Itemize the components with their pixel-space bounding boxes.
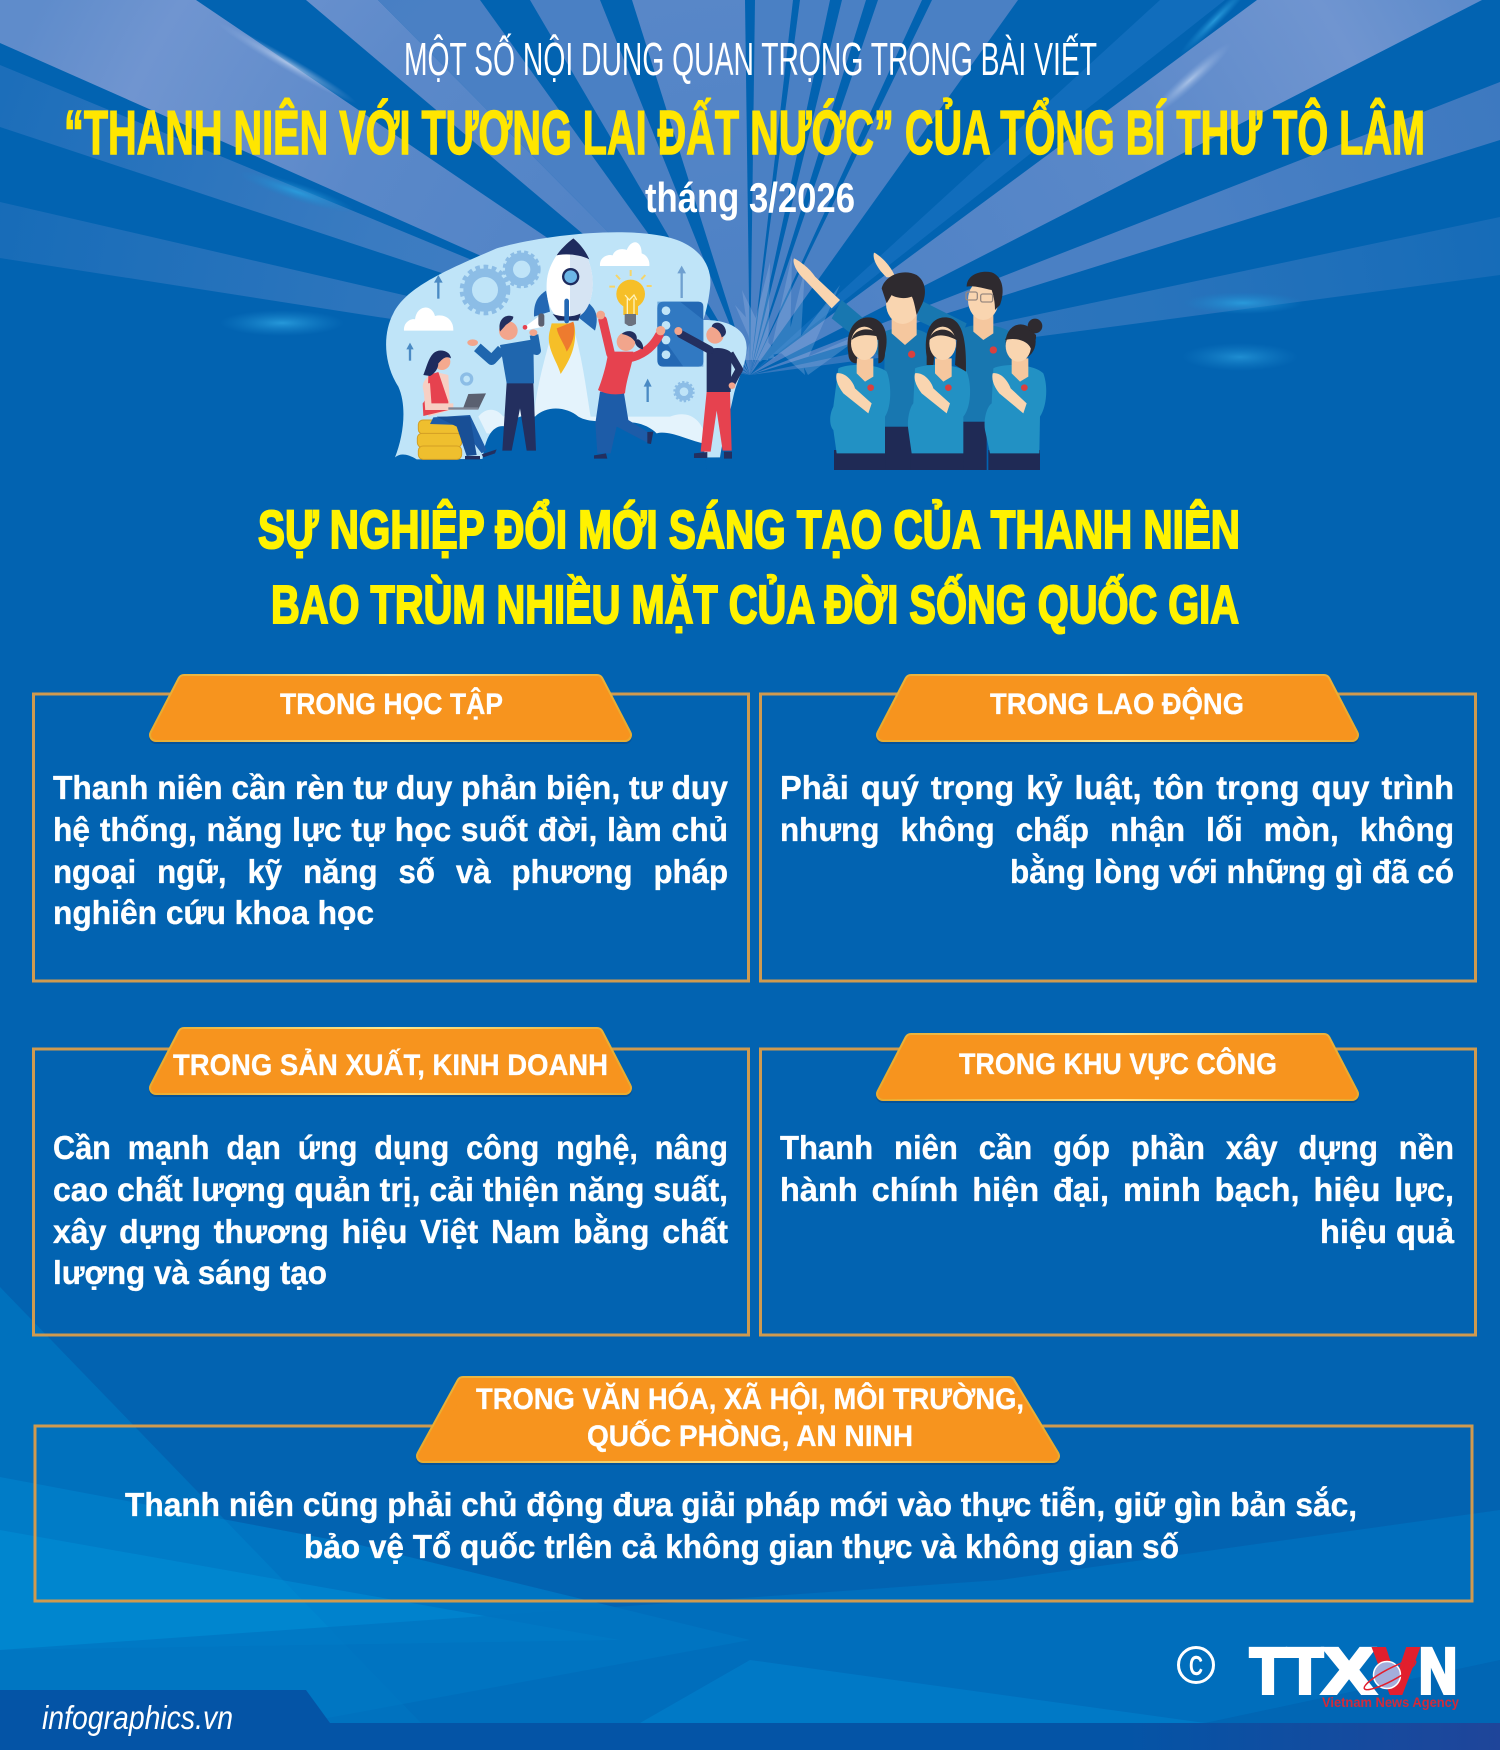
text block: in production and business: lượng và sáng tạo [53,1254,327,1291]
tab: culture, society, environment, defence: QUỐC PHÒNG, AN NINH [587,1419,913,1453]
text block: in production and business: cao chất lượng quản trị, cải thiện năng suất, [53,1171,728,1208]
tab: in the public sector [883,1040,1352,1096]
tab: in labour: TRONG LAO ĐỘNG [990,687,1244,721]
figure: back man raising arm [794,253,967,470]
header: kicker: MỘT SỐ NỘI DUNG QUAN TRỌNG TRONG BÀI VIẾT [404,33,1097,85]
text block: in the public sector: Thanh niên cần góp phần xây dựng nền [780,1129,1454,1166]
text block: in the public sector: hiệu quả [1320,1213,1455,1250]
section heading [258,499,1240,635]
panel: in labour [760,681,1476,981]
tab: culture, society, environment, defence: TRONG VĂN HÓA, XÃ HỘI, MÔI TRƯỜNG, [476,1382,1024,1416]
tab: in studying: TRONG HỌC TẬP [280,687,503,721]
text block: in the public sector [780,1129,1455,1250]
text block: in labour: nhưng không chấp nhận lối mòn, không [780,811,1454,848]
text block: in labour: Phải quý trọng kỷ luật, tôn trọng quy trình [780,769,1454,806]
figure: woman on coins with laptop [417,351,497,459]
text block: in studying: Thanh niên cần rèn tư duy phản biện, tư duy [53,769,729,806]
text block: culture, society, environment, defence: bảo vệ Tổ quốc trlên cả không gian thực và không gian số [304,1528,1179,1565]
logo: TTXVN: T [1250,1635,1286,1707]
icon: light bulb [609,270,652,326]
figure: back man with glasses [962,272,1017,470]
logo: TTXVN: Vietnam News Agency [1322,1694,1459,1710]
icon: rocket [534,238,597,374]
icon: clouds [404,242,649,331]
illustration: startup team with rocket [386,232,747,470]
website label: infographics.vn [42,1699,233,1736]
footer band [0,1690,1500,1750]
text block: culture, society, environment, defence: Thanh niên cũng phải chủ động đưa giải pháp mới vào thực tiễn, giữ gìn bản sắc, [125,1486,1357,1523]
figure: front woman left [830,317,890,470]
figure: man with megaphone [467,313,544,451]
illustration part: cloud blob [386,232,747,459]
text block: in studying: hệ thống, năng lực tự học suốt đời, làm chủ [53,811,728,848]
logo: TTXVN [1250,1635,1459,1710]
panel: culture, society, environment, defence [35,1382,1472,1601]
tab: in production and business [156,1034,625,1090]
tab: in production and business: TRONG SẢN XUẤT, KINH DOANH [173,1048,608,1082]
panel: in studying [34,681,748,981]
figure: front woman middle [908,317,970,470]
text block: in the public sector: hành chính hiện đại, minh bạch, hiệu lực, [780,1171,1454,1208]
text block: in production and business: xây dựng thương hiệu Việt Nam bằng chất [53,1213,728,1250]
text block: in production and business [53,1129,728,1291]
tab: in the public sector: TRONG KHU VỰC CÔNG [959,1047,1277,1081]
text block: in studying [53,769,729,931]
text block: in studying: nghiên cứu khoa học [53,894,374,931]
header: date: tháng 3/2026 [645,174,855,221]
logo: TTXVN: X [1323,1635,1375,1707]
illustration: five youth union members [794,253,1046,470]
icon: checklist board [657,302,703,367]
icon: copyright [1178,1648,1214,1682]
illustration part: ground clouds [482,409,707,470]
logo: TTXVN: N [1419,1635,1457,1707]
figure: woman cheering [594,311,665,459]
illustration part: rocket trail and smoke [478,333,707,444]
tab: culture, society, environment, defence [423,1382,1053,1458]
tab: in labour [883,681,1352,737]
text block: in labour [780,769,1454,890]
icon: light fan behind illustrations [735,255,870,375]
text block: culture, society, environment, defence [125,1486,1357,1565]
text block: in production and business: Cần mạnh dạn ứng dụng công nghệ, nâng [53,1129,728,1166]
icon: up arrows [406,266,686,402]
icon: copyright: C [1189,1650,1203,1681]
panel: in the public sector [760,1040,1476,1335]
figure: man pointing [674,323,739,459]
icon: gears [462,252,694,401]
text block: in labour: bằng lòng với những gì đã có [1010,853,1454,890]
panel: in production and business [34,1034,748,1335]
figure: front woman right [985,319,1046,470]
logo: TTXVN: V [1374,1635,1418,1707]
text block: in studying: ngoại ngữ, kỹ năng số và phương pháp [53,853,728,890]
tab: in studying [156,681,625,737]
logo: TTXVN: T [1287,1635,1323,1707]
